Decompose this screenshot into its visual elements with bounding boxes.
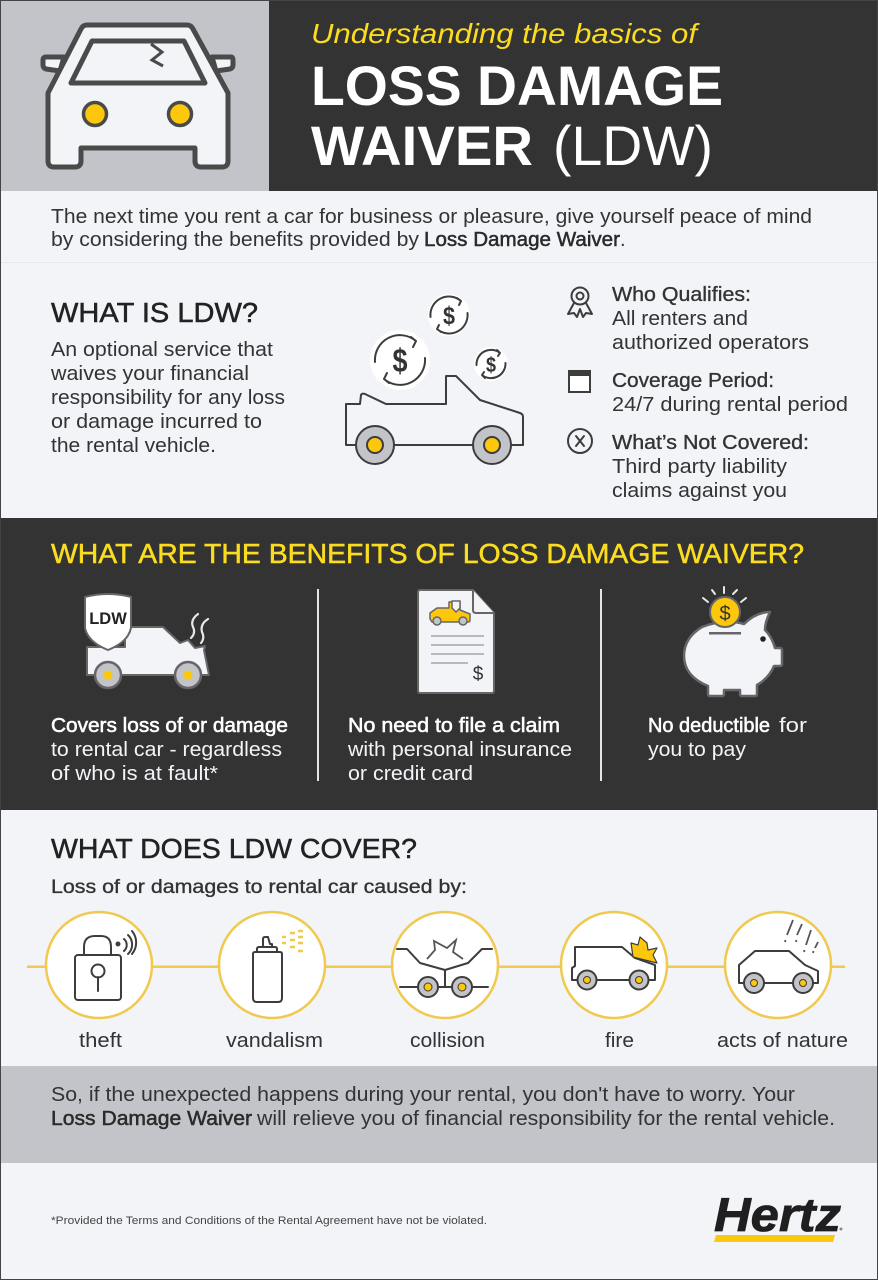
icon: cracked windshield car xyxy=(43,25,233,167)
fact: not covered xyxy=(568,429,809,502)
fact: coverage period xyxy=(568,370,848,416)
icon: calendar xyxy=(568,370,591,392)
intro text: . xyxy=(620,229,626,251)
fact: who qualifies: authorized operators xyxy=(612,332,809,354)
closing statement band: Loss Damage Waiver xyxy=(51,1108,252,1130)
heading: WHAT ARE THE BENEFITS OF LOSS DAMAGE WAIVER? xyxy=(51,538,804,569)
item: vandalism xyxy=(219,912,325,1052)
icon: car under falling debris xyxy=(739,920,818,993)
panel: what is LDW xyxy=(50,284,848,502)
item: vandalism: vandalism xyxy=(226,1030,323,1052)
fact: not covered: claims against you xyxy=(612,480,787,502)
item: fire: fire xyxy=(605,1030,634,1052)
fact: who qualifies: All renters and xyxy=(612,308,748,330)
fact: who qualifies xyxy=(568,284,809,354)
icon: award ribbon xyxy=(568,288,592,317)
icon: lock xyxy=(75,931,136,1000)
benefit: no claim: with personal insurance xyxy=(347,739,572,761)
panel: benefits xyxy=(0,518,878,810)
fact: coverage period: 24/7 during rental period xyxy=(612,394,848,416)
heading: WHAT DOES LDW COVER? xyxy=(51,833,417,864)
benefit: no claim: No need to file a claim xyxy=(348,715,560,737)
icon: x in circle xyxy=(568,429,592,453)
icon: two cars colliding xyxy=(397,940,492,997)
definition text xyxy=(50,339,285,457)
benefit: no deductible xyxy=(648,587,807,761)
benefit: no deductible: for xyxy=(779,715,807,737)
icon: piggy bank with coin: $ xyxy=(719,603,731,625)
intro text: The next time you rent a car for business or pleasure, give yourself peace of mind xyxy=(51,206,812,228)
benefit: no deductible: No deductible xyxy=(648,715,770,737)
definition text: waives your financial xyxy=(50,363,249,385)
title: WAIVER xyxy=(311,114,533,177)
closing statement band: will relieve you of financial responsibility for the rental vehicle. xyxy=(256,1108,835,1130)
fact: not covered: What’s Not Covered: xyxy=(612,432,809,454)
closing statement band: So, if the unexpected happens during your rental, you don't have to worry. Your xyxy=(51,1084,795,1106)
title: (LDW) xyxy=(553,114,713,177)
benefit: no claim: or credit card xyxy=(348,763,473,785)
intro text: Loss Damage Waiver xyxy=(424,229,620,251)
title: Understanding the basics of xyxy=(311,18,701,49)
benefit: covers loss xyxy=(51,594,288,785)
icon: van on fire xyxy=(572,937,657,990)
icon: spray can xyxy=(253,931,303,1002)
header banner xyxy=(0,0,878,191)
item: acts of nature xyxy=(717,912,848,1052)
benefit: no deductible: you to pay xyxy=(648,739,746,761)
definition text: responsibility for any loss xyxy=(51,387,285,409)
item: fire xyxy=(561,912,667,1052)
footnote: *Provided the Terms and Conditions of the Rental Agreement have not be violated. xyxy=(51,1215,487,1227)
definition text: An optional service that xyxy=(51,339,273,361)
item: collision xyxy=(392,912,498,1052)
icon: damaged car with LDW shield xyxy=(85,594,209,688)
intro text: by considering the benefits provided by xyxy=(51,229,419,251)
subheading: Loss of or damages to rental car caused by: xyxy=(51,877,467,898)
item: collision: collision xyxy=(410,1030,485,1052)
fact: coverage period: Coverage Period: xyxy=(612,370,774,392)
title: LOSS DAMAGE xyxy=(311,54,723,117)
definition text: the rental vehicle. xyxy=(51,435,216,457)
item: theft xyxy=(46,912,152,1052)
benefit: no claim xyxy=(347,590,572,785)
icon: damaged car with LDW shield: LDW xyxy=(89,610,127,628)
panel: what does LDW cover xyxy=(27,833,848,1052)
icon: convertible car with dollar signs: $ xyxy=(443,302,455,330)
benefit: covers loss: Covers loss of or damage xyxy=(51,715,288,737)
intro text xyxy=(51,206,812,251)
icon: claim document: $ xyxy=(473,664,484,685)
definition text: or damage incurred to xyxy=(51,411,262,433)
closing statement band xyxy=(0,1066,878,1163)
item: acts of nature: acts of nature xyxy=(717,1030,848,1052)
icon: convertible car with dollar signs: $ xyxy=(392,342,408,379)
Hertz logo: Hertz xyxy=(714,1188,842,1241)
benefit: covers loss: to rental car - regardless xyxy=(51,739,282,761)
icon: convertible car with dollar signs: $ xyxy=(486,354,496,377)
icon: claim document xyxy=(418,590,494,693)
benefit: covers loss: of who is at fault* xyxy=(51,763,218,785)
fact: not covered: Third party liability xyxy=(612,456,787,478)
title xyxy=(311,18,723,177)
fact: who qualifies: Who Qualifies: xyxy=(612,284,751,306)
icon: piggy bank with coin xyxy=(684,587,782,696)
heading: WHAT IS LDW? xyxy=(51,297,258,328)
item: theft: theft xyxy=(79,1030,122,1052)
icon: convertible car with dollar signs xyxy=(346,294,523,464)
